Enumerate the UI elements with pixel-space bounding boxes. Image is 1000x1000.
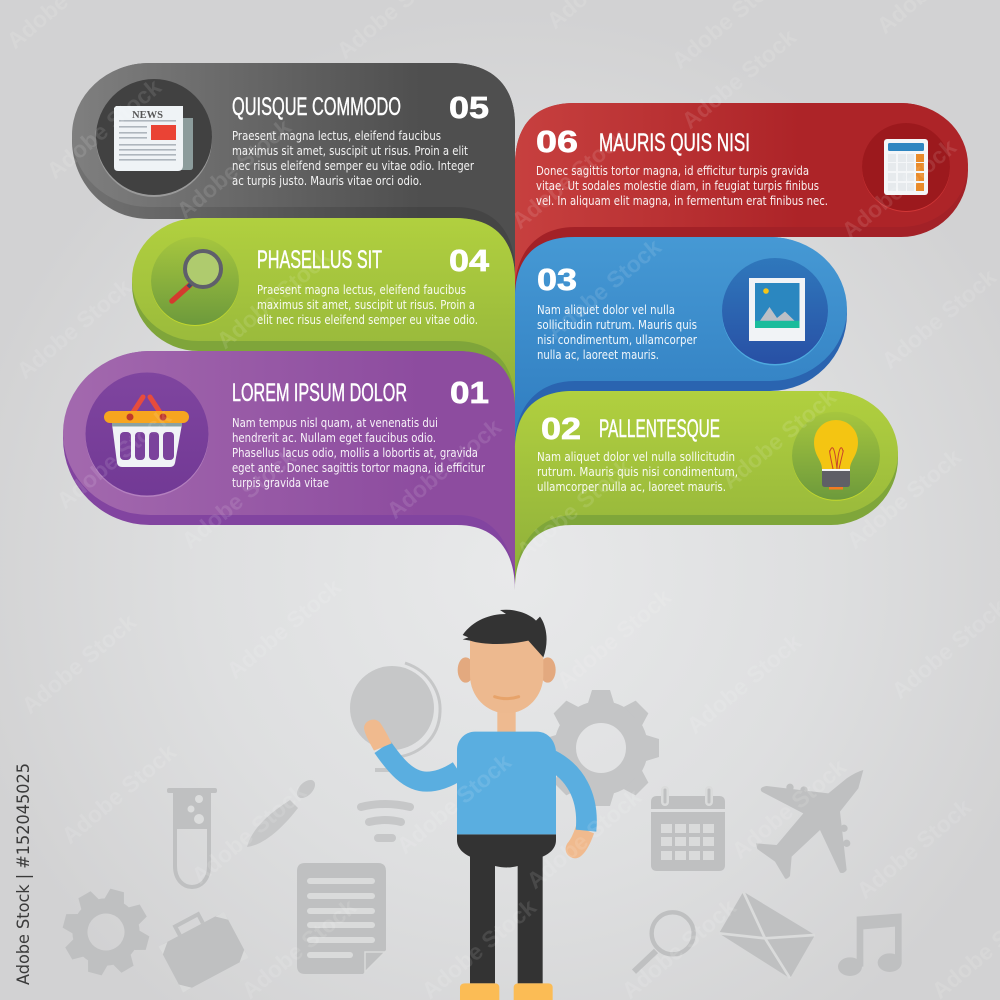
- icon: basket: [104, 397, 189, 467]
- text block: turpis gravida vitae: [232, 476, 329, 490]
- ears: [458, 657, 556, 683]
- text block: nisi condimentum, ullamcorper: [537, 333, 697, 347]
- number: 05: [449, 90, 489, 125]
- watermark: Adobe Stock: [392, 748, 516, 859]
- heading: LOREM IPSUM DOLOR: [232, 379, 407, 407]
- icon: newspaper: NEWS: [132, 110, 163, 121]
- watermark: Adobe Stock: [177, 443, 301, 554]
- icon: briefcase: [154, 903, 248, 992]
- watermark: Adobe Stock: [57, 738, 181, 849]
- watermark: Adobe Stock: [212, 243, 336, 354]
- icon: calculator: [884, 139, 928, 195]
- text block: vel. In aliquam elit magna, in fermentum erat finibus nec.: [536, 194, 828, 208]
- icon: wifi: [361, 804, 410, 842]
- icon: music note: [838, 913, 902, 976]
- watermark: Adobe Stock: [542, 233, 666, 344]
- panel: 06 mauris quis nisi: [515, 103, 968, 300]
- panel: 01 lorem ipsum dolor: [63, 351, 515, 590]
- number: 04: [449, 243, 490, 278]
- icon circle: [792, 413, 880, 501]
- watermark: Adobe Stock: [682, 628, 806, 739]
- icon circle: [151, 238, 239, 326]
- watermark: Adobe Stock: [12, 273, 136, 384]
- watermark: Adobe Stock: [222, 573, 346, 684]
- watermark: Adobe Stock: [52, 403, 176, 514]
- right arm: [550, 759, 586, 831]
- text block: [257, 283, 478, 327]
- watermark: Adobe Stock: [382, 413, 506, 524]
- background icons: [53, 663, 902, 992]
- text block: maximus sit amet, suscipit ut risus. Proin a: [257, 298, 475, 312]
- watermark: Adobe Stock: [172, 113, 296, 224]
- icon: large gear: [543, 690, 659, 806]
- watermark: Adobe Stock: [852, 793, 976, 904]
- text block: Donec sagittis tortor magna, id efficitur turpis gravida: [536, 164, 809, 178]
- watermark: Adobe Stock: [17, 608, 141, 719]
- watermark: Adobe Stock: [552, 583, 676, 694]
- text block: maximus sit amet, suscipit ut risus. Proin a elit: [232, 144, 468, 158]
- text block: [536, 164, 828, 208]
- icon: document: [297, 863, 386, 974]
- left hand: [364, 720, 392, 751]
- neck: [497, 710, 516, 734]
- text block: [232, 129, 474, 188]
- watermark: Adobe Stock: [842, 443, 966, 554]
- text block: elit nec risus eleifend semper eu vitae odio.: [257, 313, 478, 327]
- panel: 03: [515, 237, 847, 460]
- torso: [457, 732, 556, 834]
- heading: PALLENTESQUE: [599, 415, 720, 443]
- icon: test tube: [167, 788, 217, 887]
- text block: nulla ac, laoreet mauris.: [537, 348, 659, 362]
- text block: Nam tempus nisl quam, at venenatis dui: [232, 416, 438, 430]
- left arm: [383, 747, 458, 782]
- right hand: [566, 826, 594, 858]
- text block: rutrum. Mauris quis nisi condimentum,: [537, 465, 738, 479]
- icon: newspaper: [114, 106, 193, 171]
- icon circle: [86, 374, 208, 497]
- text block: Nam aliquet dolor vel nulla sollicitudin: [537, 450, 735, 464]
- hair: [463, 610, 547, 657]
- text block: ullamcorper nulla ac, laoreet mauris.: [537, 480, 726, 494]
- icon circle: [862, 124, 950, 212]
- icon: light bulb: [814, 420, 858, 490]
- text block: hendrerit ac. Nullam eget faucibus odio.: [232, 431, 436, 445]
- watermark: Adobe Stock: [677, 23, 801, 134]
- icon: magnifying glass: [172, 251, 221, 301]
- trousers: [457, 834, 556, 983]
- watermark: Adobe Stock: [522, 783, 646, 894]
- stock id text: Adobe Stock | #152045025: [14, 763, 33, 985]
- text block: [232, 416, 485, 490]
- panel: 05 quisque commodo: [72, 63, 515, 300]
- watermark: Adobe Stock: [837, 133, 961, 244]
- face: [470, 638, 543, 713]
- text block: sollicitudin rutrum. Mauris quis: [537, 318, 697, 332]
- watermark: Adobe Stock: [187, 778, 311, 889]
- heading: MAURIS QUIS NISI: [599, 129, 750, 157]
- number: 01: [450, 375, 489, 410]
- icon: magnifier: [634, 912, 694, 972]
- heading: QUISQUE COMMODO: [232, 93, 401, 121]
- shoes: [460, 983, 553, 1000]
- panel: 04 phasellus sit: [132, 218, 515, 420]
- watermark: Adobe Stock: [717, 383, 841, 494]
- number: 06: [536, 124, 578, 159]
- icon: picture: [749, 278, 805, 341]
- text block: Nam aliquet dolor vel nulla: [537, 303, 675, 317]
- heading: PHASELLUS SIT: [257, 246, 382, 274]
- text block: Phasellus lacus odio, mollis a lobortis at, gravida: [232, 446, 478, 460]
- text block: eget ante. Donec sagittis tortor magna, id efficitur: [232, 461, 485, 475]
- text block: [537, 450, 738, 494]
- watermark: Adobe Stock: [507, 123, 631, 234]
- icon: small gear: [53, 879, 159, 985]
- icon: envelope: [719, 892, 815, 978]
- icon circle: [722, 260, 828, 366]
- text block: Praesent magna lectus, eleifend faucibus: [232, 129, 441, 143]
- icon: paint brush: [247, 777, 318, 847]
- watermark: Adobe Stock: [877, 263, 1000, 374]
- smile: [495, 697, 519, 699]
- panel: 02 pallentesque: [515, 391, 898, 590]
- icon: globe: [350, 663, 440, 772]
- number: 02: [541, 411, 581, 446]
- text block: vitae. Ut sodales molestie diam, in feugiat turpis finibus: [536, 179, 819, 193]
- text block: ac turpis justo. Mauris vitae orci odio.: [232, 174, 422, 188]
- person: [364, 610, 594, 1000]
- text block: Praesent magna lectus, eleifend faucibus: [257, 283, 466, 297]
- icon: calendar: [651, 790, 725, 871]
- number: 03: [537, 262, 577, 297]
- text block: nec risus eleifend semper eu vitae odio. Integer: [232, 159, 474, 173]
- watermark: Adobe Stock: [512, 453, 636, 564]
- text block: [537, 303, 697, 362]
- icon: airplane: [756, 770, 863, 879]
- watermark: Adobe Stock: [727, 753, 851, 864]
- watermark: Adobe Stock: [42, 73, 166, 184]
- icon circle: [96, 81, 212, 197]
